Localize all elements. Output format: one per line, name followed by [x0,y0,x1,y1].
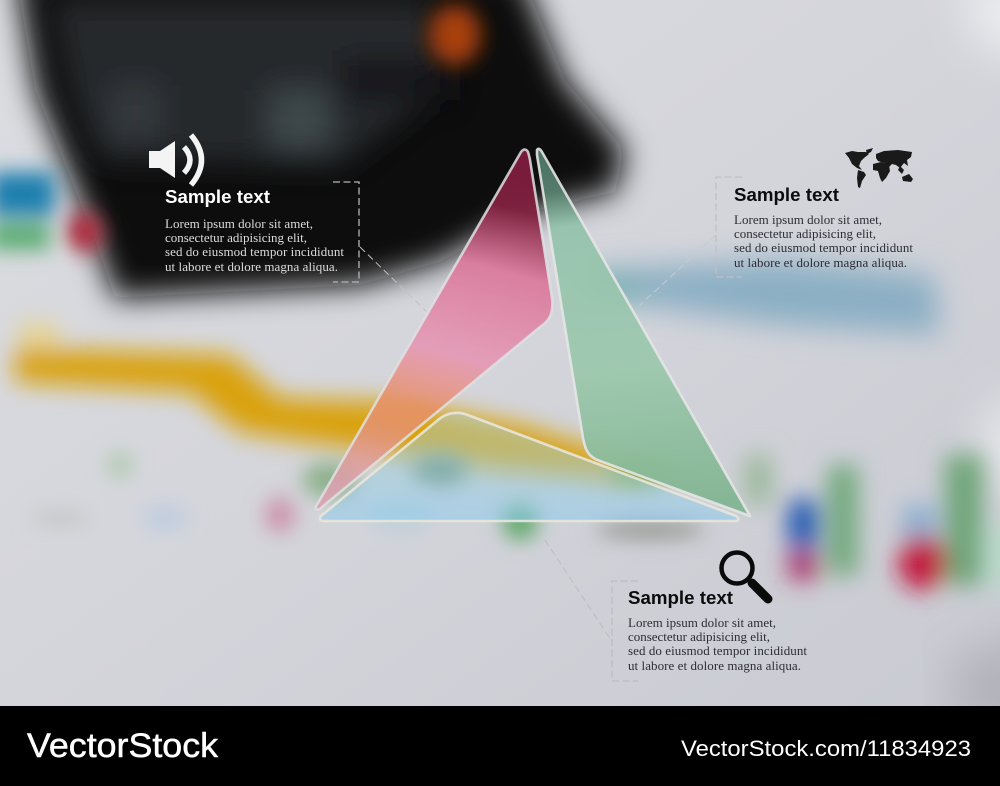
icon: world map [845,148,913,188]
bracket [716,177,742,277]
segment: green [537,149,750,516]
body text [165,216,344,274]
body text: sed do eiusmod tempor incididunt [734,240,913,255]
body text: sed do eiusmod tempor incididunt [628,643,807,658]
text block: bottom [612,552,807,681]
icon: speaker [149,135,202,185]
body text: consectetur adipisicing elit, [628,629,770,644]
triangle infographic [316,149,750,521]
body text: Lorem ipsum dolor sit amet, [734,212,882,227]
text block: top left [149,135,359,282]
body text: Lorem ipsum dolor sit amet, [628,615,776,630]
bracket [612,581,638,681]
body text: Lorem ipsum dolor sit amet, [165,216,313,231]
footer logo: VectorStock [27,727,219,765]
body text: ut labore et dolore magna aliqua. [165,259,338,274]
icon: magnifier [722,552,768,599]
connector lines [360,235,716,640]
body text [734,212,913,270]
body text [628,615,807,673]
segment: red [316,150,552,510]
body text: sed do eiusmod tempor incididunt [165,244,344,259]
segment: blue [320,413,738,521]
body text: ut labore et dolore magna aliqua. [628,658,801,673]
body text: consectetur adipisicing elit, [165,230,307,245]
heading: Sample text [628,587,733,608]
heading: Sample text [734,184,839,205]
bracket [333,182,359,282]
footer url: VectorStock.com/11834923 [681,736,971,761]
body text: ut labore et dolore magna aliqua. [734,255,907,270]
footer bar [0,706,1000,786]
body text: consectetur adipisicing elit, [734,226,876,241]
text block: top right [716,148,913,277]
heading: Sample text [165,186,270,207]
